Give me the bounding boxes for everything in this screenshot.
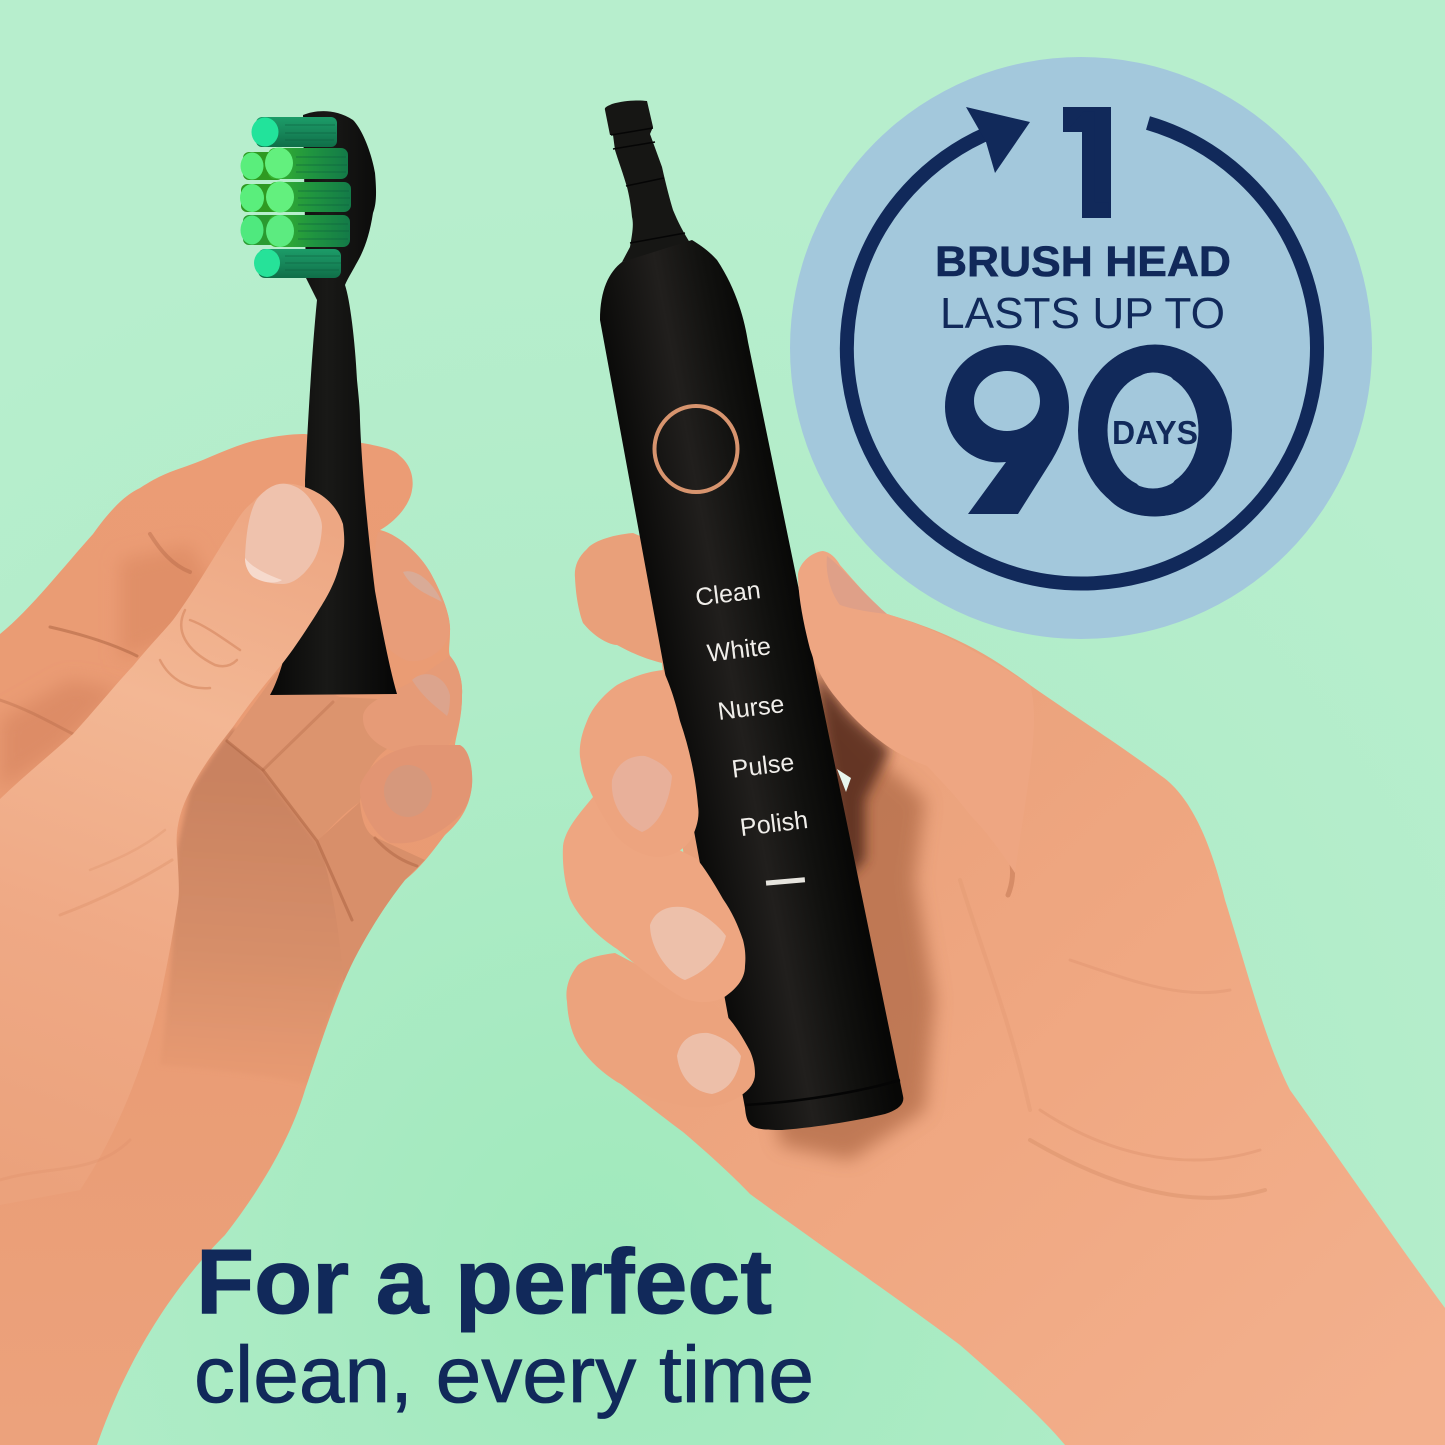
right hand: deep shadow under thumb: [815, 670, 890, 880]
left hand: little fingertip: [360, 745, 472, 843]
finger: middle: [580, 670, 699, 857]
headline: regular line: clean, every time: [194, 1330, 814, 1419]
badge: brush head heading: BRUSH HEAD: [935, 238, 1231, 286]
electric toothbrush: [600, 100, 903, 1130]
finger: thumb: [798, 551, 1034, 873]
toothbrush: copper power ring: [654, 406, 738, 492]
badge: circular arrow ring: [847, 107, 1317, 584]
badge: arrow head: [966, 107, 1030, 173]
left thumb: knuckle creases: [0, 610, 240, 1180]
badge: number 0 with days: DAYS: [1112, 414, 1198, 451]
fingernail: middle: [612, 756, 672, 832]
badge: 1 brush head lasts up to 90 days: [790, 57, 1372, 639]
toothbrush: mode labels: White: [706, 632, 772, 668]
badge: number 1: 1: [1063, 78, 1111, 251]
left thumb: [0, 484, 344, 1205]
left hand: ring fingertip: [363, 656, 462, 754]
brush head: bristles: [240, 117, 351, 278]
left hand holding brush head: [0, 434, 472, 1445]
brush head: [240, 111, 397, 695]
toothbrush: neck ribs: [611, 128, 685, 243]
right hand: shadow beside handle: [760, 690, 935, 1160]
left hand: palm shading and finger segments: [0, 534, 425, 1085]
toothbrush: mode labels: [694, 576, 809, 842]
toothbrush: mode labels: Clean: [694, 576, 762, 612]
right hand: palm and rear finger: [575, 533, 1445, 1445]
finger gap highlight: [837, 769, 851, 792]
left hand: palm and index finger: [0, 434, 472, 1445]
right hand fingers in front of handle: [563, 551, 1034, 1107]
toothbrush: mode labels: Polish: [739, 806, 809, 842]
right hand: palm creases: [960, 830, 1265, 1198]
finger: little: [566, 953, 755, 1107]
badge: number 1: [1063, 107, 1111, 218]
toothbrush: indicator dash: [766, 877, 805, 886]
right hand holding toothbrush: [575, 533, 1445, 1445]
left thumb: finger shape: [0, 484, 344, 1205]
headline: [194, 1231, 814, 1419]
left hand: middle fingertip: [374, 532, 450, 661]
badge: blue disc: [790, 57, 1372, 639]
toothbrush: mode labels: Pulse: [730, 748, 796, 784]
left hand: fingernails: [384, 571, 450, 817]
brush head: black stem and head: [270, 111, 397, 695]
toothbrush: handle: [600, 240, 903, 1130]
finger: ring: [563, 797, 745, 1002]
toothbrush: mode labels: Nurse: [716, 690, 786, 726]
badge: lasts up to: LASTS UP TO: [940, 289, 1225, 338]
badge: number 0 with days: 0: [1078, 297, 1232, 565]
fingernail: little: [677, 1033, 741, 1094]
left thumb: nail tip: [245, 558, 282, 582]
toothbrush: neck: [605, 100, 692, 262]
left thumb: nail: [245, 484, 322, 584]
headline: bold line: For a perfect: [196, 1231, 772, 1333]
fingernail: ring: [650, 907, 726, 980]
toothbrush: base line: [745, 1080, 900, 1105]
fingernail: thumb: [827, 556, 887, 614]
